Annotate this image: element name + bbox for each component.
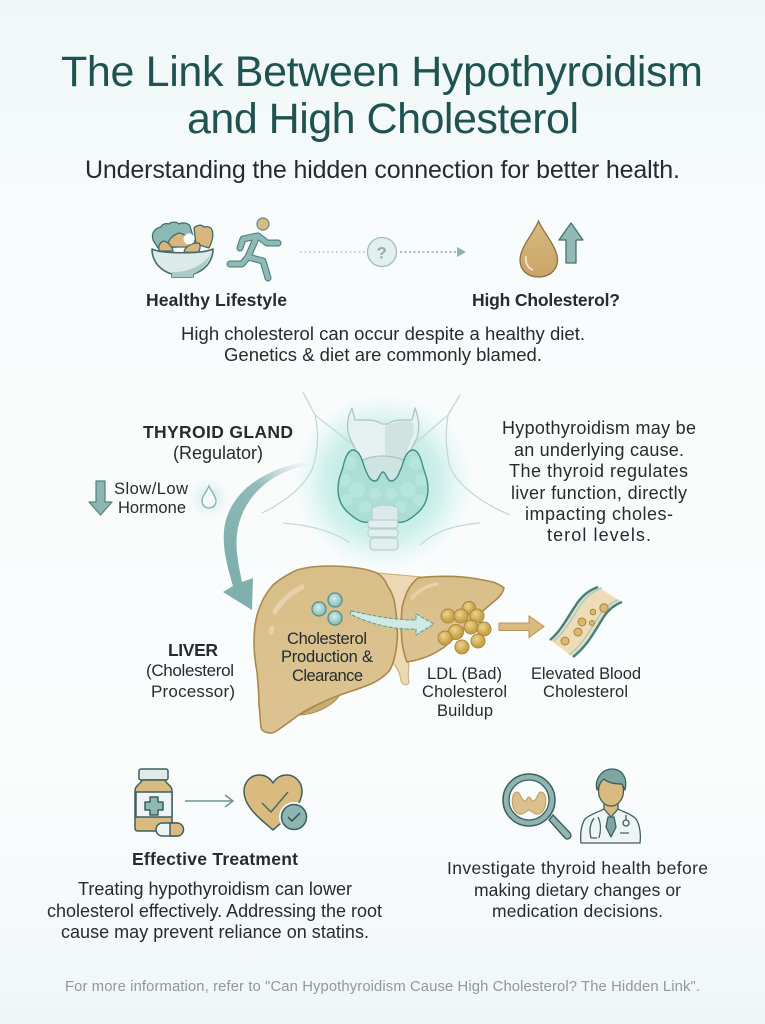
label: liver: (Cholesterol: [146, 661, 234, 680]
text: treatment body: [47, 879, 382, 942]
icon: medicine bottle: [135, 769, 184, 836]
text: intro: [181, 323, 585, 365]
text: investigate: making dietary changes or: [474, 880, 681, 900]
label: cholesterol production: Clearance: [292, 667, 363, 685]
label: LDL buildup: LDL (Bad): [427, 665, 502, 683]
text: intro: High cholesterol can occur despite a healthy diet.: [181, 323, 585, 344]
text: underlying cause: impacting choles-: [525, 504, 673, 524]
text: investigate: [447, 858, 708, 921]
label: liver: LIVER: [168, 640, 218, 660]
arrow: molecules to buildup: [350, 611, 434, 635]
panel: lifestyle question: [146, 218, 620, 365]
label: LDL buildup: Cholesterol: [422, 683, 507, 701]
label: slow low hormone: Slow/Low: [114, 480, 188, 498]
label: cholesterol production: Cholesterol: [287, 630, 367, 648]
label: elevated blood cholesterol: Elevated Blood: [531, 665, 641, 683]
icon: trachea: [368, 505, 398, 550]
subtitle: Understanding the hidden connection for better health.: [85, 156, 680, 184]
icon: hormone drop: [187, 476, 231, 520]
label: elevated blood cholesterol: Cholesterol: [543, 683, 628, 701]
arrow: buildup to blood: [499, 616, 544, 638]
title: and High Cholesterol: [187, 95, 579, 143]
arrow: thyroid to liver: [223, 461, 307, 610]
label: slow low hormone: [114, 480, 188, 517]
text: intro: Genetics & diet are commonly blamed.: [224, 344, 542, 365]
dotted arrow with question mark: [300, 238, 466, 266]
title: The Link Between Hypothyroidism: [61, 48, 703, 96]
text: underlying cause: Hypothyroidism may be: [502, 418, 696, 438]
text: investigate: Investigate thyroid health before: [447, 858, 708, 878]
icon: larynx: [348, 408, 419, 486]
label: thyroid gland: THYROID GLAND: [143, 422, 293, 442]
icon: salad bowl: [152, 222, 213, 277]
text: underlying cause: terol levels.: [547, 525, 651, 545]
icon: down arrow: [89, 481, 112, 515]
icon: thyroid gland: [338, 450, 428, 522]
panel: effective treatment: [47, 769, 382, 942]
label: elevated blood cholesterol: [531, 665, 641, 701]
label: cholesterol production: [281, 630, 373, 685]
icon: cholesterol molecules: [312, 593, 342, 625]
icon: doctor: [581, 769, 640, 843]
text: underlying cause: an underlying cause.: [514, 440, 684, 460]
dotted arrow with question mark: ?: [376, 244, 387, 262]
infographic canvas: [48, 55, 708, 994]
label: thyroid gland: (Regulator): [173, 443, 263, 463]
label: cholesterol production: Production &: [281, 648, 373, 666]
thyroid glow: [291, 392, 475, 572]
icon: heart with check: [244, 775, 308, 831]
text: treatment body: Treating hypothyroidism can lower: [78, 879, 352, 899]
footer source: For more information, refer to "Can Hypothyroidism Cause High Cholesterol? The Hidden Link".: [65, 979, 700, 995]
panel: liver: [146, 566, 641, 733]
text: underlying cause: liver function, directly: [511, 483, 687, 503]
label: thyroid gland: [143, 422, 293, 463]
label: high cholesterol: High Cholesterol?: [472, 290, 620, 310]
icon: runner: [230, 218, 278, 278]
heading: effective treatment: Effective Treatment: [132, 849, 298, 869]
label: slow low hormone: Hormone: [118, 499, 186, 517]
icon: magnifier with thyroid: [503, 774, 571, 839]
text: underlying cause: [502, 418, 696, 545]
label: liver: [146, 640, 235, 701]
text: treatment body: cause may prevent reliance on statins.: [61, 922, 369, 942]
icon: LDL cluster: [438, 602, 491, 654]
label: healthy lifestyle: Healthy Lifestyle: [146, 290, 287, 310]
text: underlying cause: The thyroid regulates: [509, 461, 688, 481]
text: investigate: medication decisions.: [492, 901, 663, 921]
icon: blood vessel: [550, 587, 622, 657]
panel: thyroid: [89, 392, 696, 610]
title: [61, 48, 703, 143]
text: treatment body: cholesterol effectively. Addressing the root: [47, 901, 382, 921]
icon: liver: [254, 566, 504, 733]
icon: cholesterol drop and up arrow: [520, 221, 583, 277]
arrow: treatment: [185, 795, 233, 807]
label: LDL buildup: Buildup: [437, 702, 493, 720]
label: LDL buildup: [422, 665, 507, 720]
panel: investigate: [447, 769, 708, 921]
label: liver: Processor): [151, 682, 235, 701]
neck outline: [262, 392, 510, 545]
